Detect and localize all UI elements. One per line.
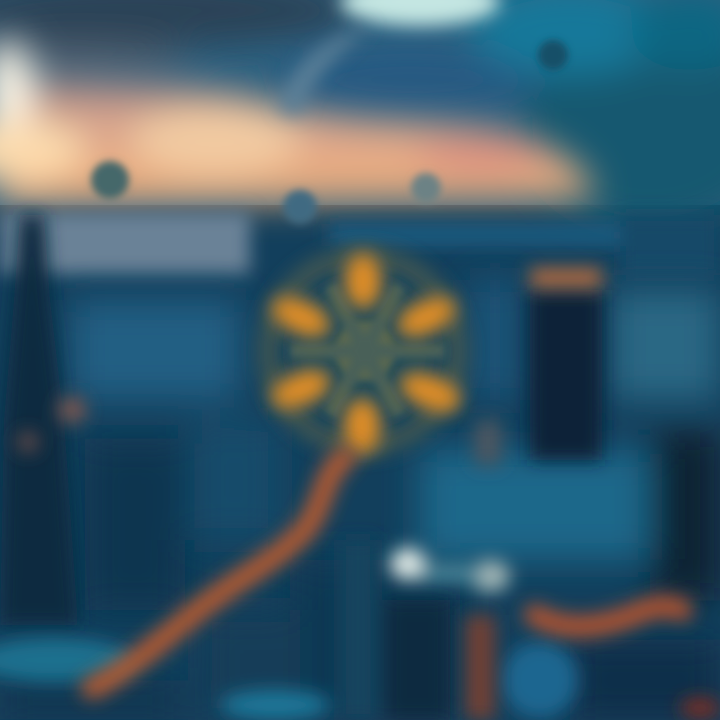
rust tower top and accents [17,268,602,465]
bright spot near bottom center [390,548,510,592]
wheel spokes [290,285,445,415]
light cloud streak [280,25,372,115]
horizon haze [0,212,720,275]
dark towers [0,215,602,720]
sunset glow band [0,40,595,205]
bright cloud at top [340,0,500,26]
right orange path [535,606,682,626]
wheel outer ring [269,257,457,445]
arrow: orange rising path [92,458,345,688]
background: sky [0,0,720,215]
water bottom-left and bottom-center [0,638,578,720]
wheel orange petals [266,253,466,454]
wheel center hub [335,321,395,381]
background: lower city base [0,205,720,215]
city blocks [0,280,720,720]
floating dark orbs [91,40,568,224]
wheel inner dark hub ring [301,300,426,410]
clouds: dark upper sky [0,0,720,230]
bottom-right red corner [680,698,720,718]
lower vertical rust path [465,615,495,720]
icon: network wheel [266,253,466,454]
